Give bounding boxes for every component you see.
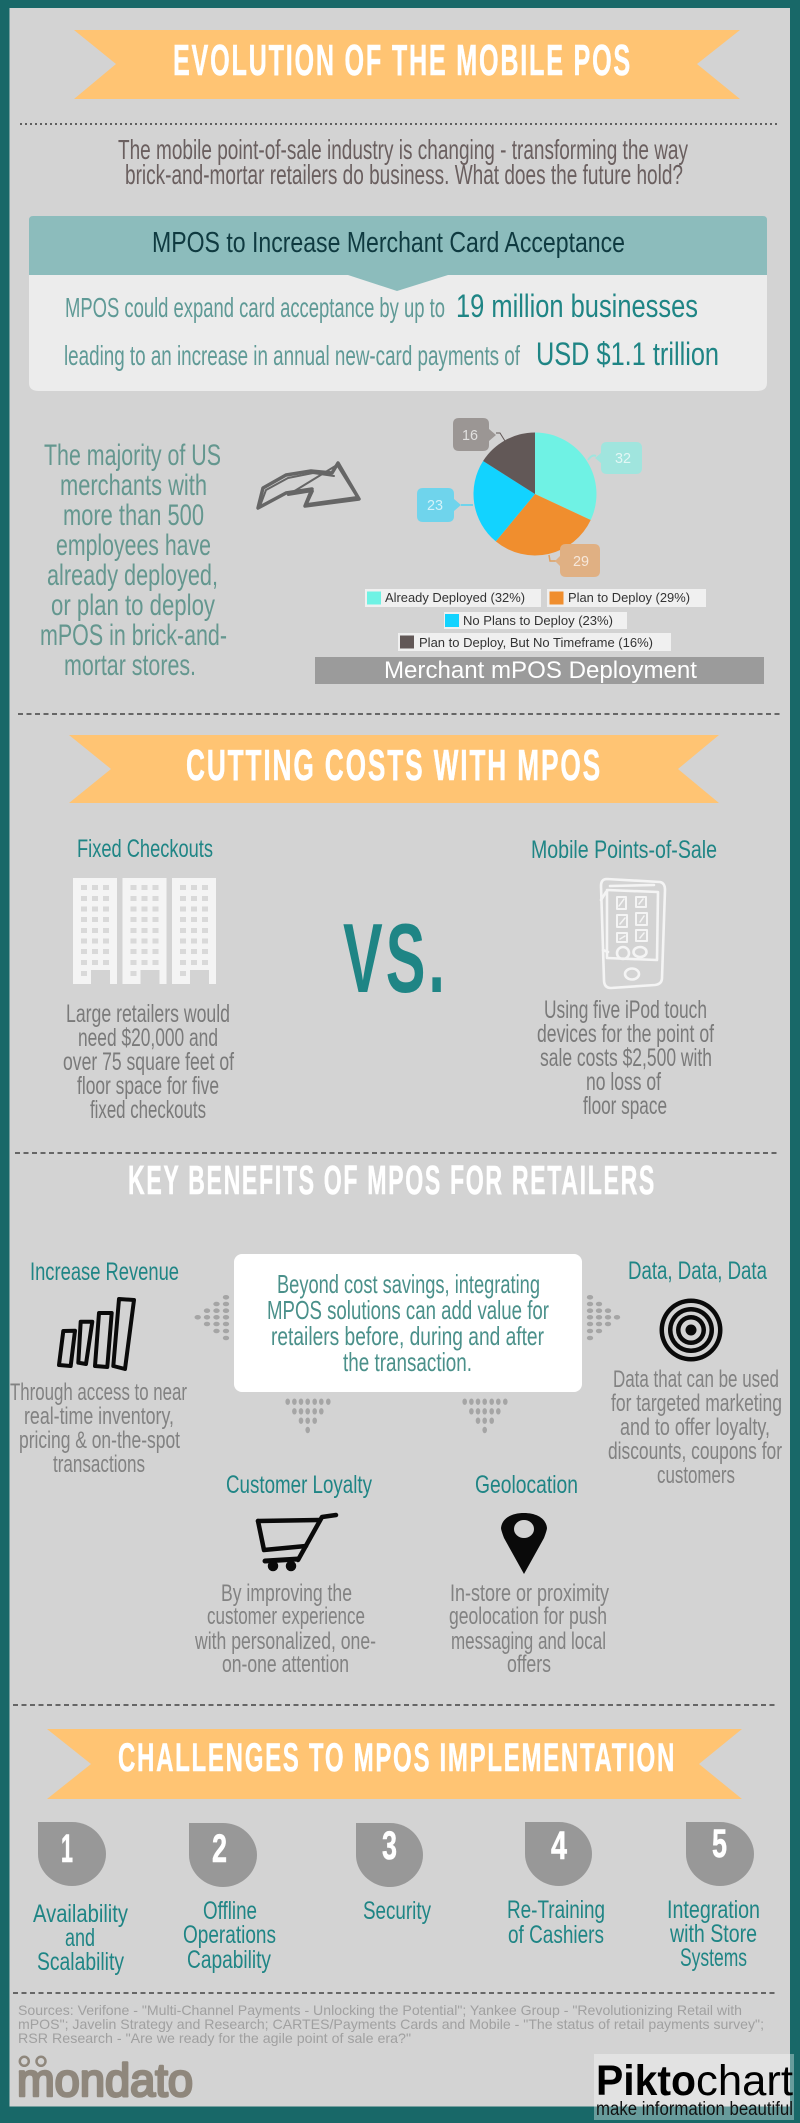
text: mobile points-of-sale: Using five iPod touch xyxy=(544,996,707,1024)
icon: target xyxy=(660,1298,722,1362)
text: geolocation: geolocation for push xyxy=(449,1603,607,1630)
callout: central box: MPOS solutions can add value for xyxy=(267,1295,549,1325)
text: fixed checkouts: floor space for five xyxy=(77,1072,219,1100)
text: data xyxy=(608,1366,782,1489)
text: customer loyalty: on-one attention xyxy=(222,1651,349,1678)
sources: RSR Research - "Are we ready for the agile point of sale era?" xyxy=(18,2030,411,2046)
label: offline: Offline xyxy=(203,1897,257,1925)
text: customer loyalty: with personalized, one- xyxy=(194,1628,376,1655)
callout: 16: 16 xyxy=(462,427,478,444)
text: geolocation: offers xyxy=(507,1651,551,1678)
text: increase revenue: pricing & on-the-spot xyxy=(19,1427,180,1454)
callout: central box: the transaction. xyxy=(343,1347,472,1377)
legend: Already Deployed (32%) xyxy=(385,590,525,605)
label: re-training: Re-Training xyxy=(507,1896,605,1924)
chart title: Merchant mPOS Deployment xyxy=(384,657,697,684)
banner: cutting costs xyxy=(69,735,719,803)
label: re-training: of Cashiers xyxy=(508,1921,604,1949)
text: majority of US merchants: mPOS in brick-and- xyxy=(40,619,227,652)
banner: challenges xyxy=(47,1729,742,1799)
text: majority of US merchants: already deployed, xyxy=(47,559,218,592)
icon: shopping cart xyxy=(258,1515,336,1569)
text: mobile points-of-sale xyxy=(537,996,714,1120)
callout: 29: 29 xyxy=(573,553,589,570)
pie chart xyxy=(417,418,642,577)
label: offline xyxy=(183,1897,276,1974)
panel: merchant card acceptance: USD $1.1 trillion xyxy=(536,336,719,372)
text: customer loyalty xyxy=(194,1580,376,1678)
challenge 2 badge xyxy=(189,1823,257,1887)
logo: piktochart: Pikto xyxy=(596,2057,696,2105)
icon: bar chart xyxy=(59,1299,134,1369)
text: majority of US merchants: mortar stores. xyxy=(64,649,196,682)
heading: increase revenue: Increase Revenue xyxy=(30,1258,179,1286)
panel: merchant card acceptance: leading to an increase in annual new-card payments of xyxy=(64,340,520,371)
heading: customer loyalty: Customer Loyalty xyxy=(226,1471,372,1499)
icon: location pin xyxy=(501,1513,547,1574)
label: integration: with Store xyxy=(669,1920,757,1948)
callout: 23: 23 xyxy=(427,497,443,514)
callout: central box xyxy=(234,1254,582,1392)
legend: Plan to Deploy (29%) xyxy=(568,590,690,605)
text: majority of US merchants: employees have xyxy=(56,529,211,562)
label: integration xyxy=(667,1896,760,1972)
challenge 5 badge xyxy=(686,1822,754,1886)
text: geolocation: In-store or proximity xyxy=(450,1580,609,1607)
challenge 2 badge: 2 xyxy=(212,1827,227,1871)
label: offline: Capability xyxy=(187,1946,271,1974)
text: geolocation: messaging and local xyxy=(451,1628,606,1655)
sources: mPOS"; Javelin Strategy and Research; CARTES/Payments Cards and Mobile - "The status of retail payments survey"; xyxy=(18,2016,764,2032)
header banner xyxy=(74,30,740,99)
text: fixed checkouts: fixed checkouts xyxy=(90,1096,206,1124)
callout: 23 xyxy=(417,488,473,522)
text: increase revenue: real-time inventory, xyxy=(24,1403,174,1430)
callout: 32 xyxy=(588,442,642,474)
text: mobile points-of-sale: devices for the point of xyxy=(537,1020,714,1048)
text: mobile points-of-sale: no loss of xyxy=(586,1068,661,1096)
heading: geolocation: Geolocation xyxy=(475,1471,578,1499)
panel: merchant card acceptance: MPOS to Increase Merchant Card Acceptance xyxy=(152,227,625,259)
text: fixed checkouts: need $20,000 and xyxy=(78,1024,218,1052)
callout: central box: Beyond cost savings, integrating xyxy=(277,1269,540,1299)
text: fixed checkouts xyxy=(63,1000,234,1124)
icon: buildings xyxy=(73,878,216,984)
label: integration: Integration xyxy=(667,1896,760,1924)
legend xyxy=(365,589,706,651)
logo: piktochart: chart xyxy=(696,2057,793,2105)
text: increase revenue: Through access to near xyxy=(10,1379,187,1406)
text: majority of US merchants xyxy=(40,439,227,682)
sources: Sources: Verifone - "Multi-Channel Payments - Unlocking the Potential"; Yankee Group - "Revolutionizing Retail with xyxy=(18,2002,742,2018)
panel: merchant card acceptance: MPOS could expand card acceptance by up to xyxy=(65,292,445,323)
chart title xyxy=(315,657,764,684)
vs label: VS. xyxy=(343,903,448,1013)
arrow: dotted right xyxy=(587,1295,620,1340)
callout: 29 xyxy=(549,544,600,577)
challenge 4 badge: 4 xyxy=(551,1824,568,1868)
callout: central box: retailers before, during and after xyxy=(271,1321,544,1351)
text: majority of US merchants: more than 500 xyxy=(63,499,204,532)
label: integration: Systems xyxy=(680,1944,747,1972)
text: geolocation xyxy=(449,1580,609,1678)
legend: No Plans to Deploy (23%) xyxy=(463,613,613,628)
label: security: Security xyxy=(363,1897,431,1925)
text: mobile points-of-sale: sale costs $2,500 with xyxy=(540,1044,712,1072)
challenge 1 badge xyxy=(38,1822,106,1886)
text: majority of US merchants: or plan to deploy xyxy=(51,589,215,622)
label: availability: Availability xyxy=(33,1900,128,1928)
challenge 1 badge: 1 xyxy=(61,1827,73,1871)
arrow: dotted down left xyxy=(285,1398,331,1433)
text: increase revenue xyxy=(10,1379,187,1478)
label: offline: Operations xyxy=(183,1921,276,1949)
arrow: dotted down right xyxy=(462,1398,508,1433)
panel: merchant card acceptance: 19 million businesses xyxy=(456,288,698,324)
arrow: dotted left xyxy=(194,1295,229,1340)
text: fixed checkouts: over 75 square feet of xyxy=(63,1048,234,1076)
callout: 32: 32 xyxy=(615,450,631,467)
intro text xyxy=(118,134,688,190)
challenge 5 badge: 5 xyxy=(712,1822,727,1866)
text: majority of US merchants: The majority of US xyxy=(44,439,221,472)
label: re-training xyxy=(507,1896,605,1949)
callout: 16 xyxy=(453,418,505,451)
panel: merchant card acceptance xyxy=(29,216,767,391)
text: increase revenue: transactions xyxy=(53,1451,145,1478)
heading: mobile points-of-sale: Mobile Points-of-Sale xyxy=(531,836,717,864)
label: availability: and xyxy=(65,1924,95,1952)
text: majority of US merchants: merchants with xyxy=(60,469,207,502)
challenge 4 badge xyxy=(525,1822,592,1886)
challenge 3 badge xyxy=(356,1823,423,1887)
sources xyxy=(18,2002,764,2046)
text: data: customers xyxy=(657,1462,735,1489)
heading: fixed checkouts: Fixed Checkouts xyxy=(77,835,213,863)
text: mobile points-of-sale: floor space xyxy=(583,1092,667,1120)
text: fixed checkouts: Large retailers would xyxy=(66,1000,230,1028)
label: availability: Scalability xyxy=(37,1948,124,1976)
challenge 3 badge: 3 xyxy=(382,1824,397,1868)
logo: piktochart xyxy=(594,2054,794,2120)
icon: sketched phone xyxy=(601,879,665,988)
text: customer loyalty: By improving the xyxy=(221,1580,352,1607)
text: customer loyalty: customer experience xyxy=(207,1603,365,1630)
logo: mondato: mondato xyxy=(17,2054,193,2106)
legend: Plan to Deploy, But No Timeframe (16%) xyxy=(419,635,653,650)
label: availability xyxy=(33,1900,128,1976)
icon: sketched arrow xyxy=(258,463,359,508)
